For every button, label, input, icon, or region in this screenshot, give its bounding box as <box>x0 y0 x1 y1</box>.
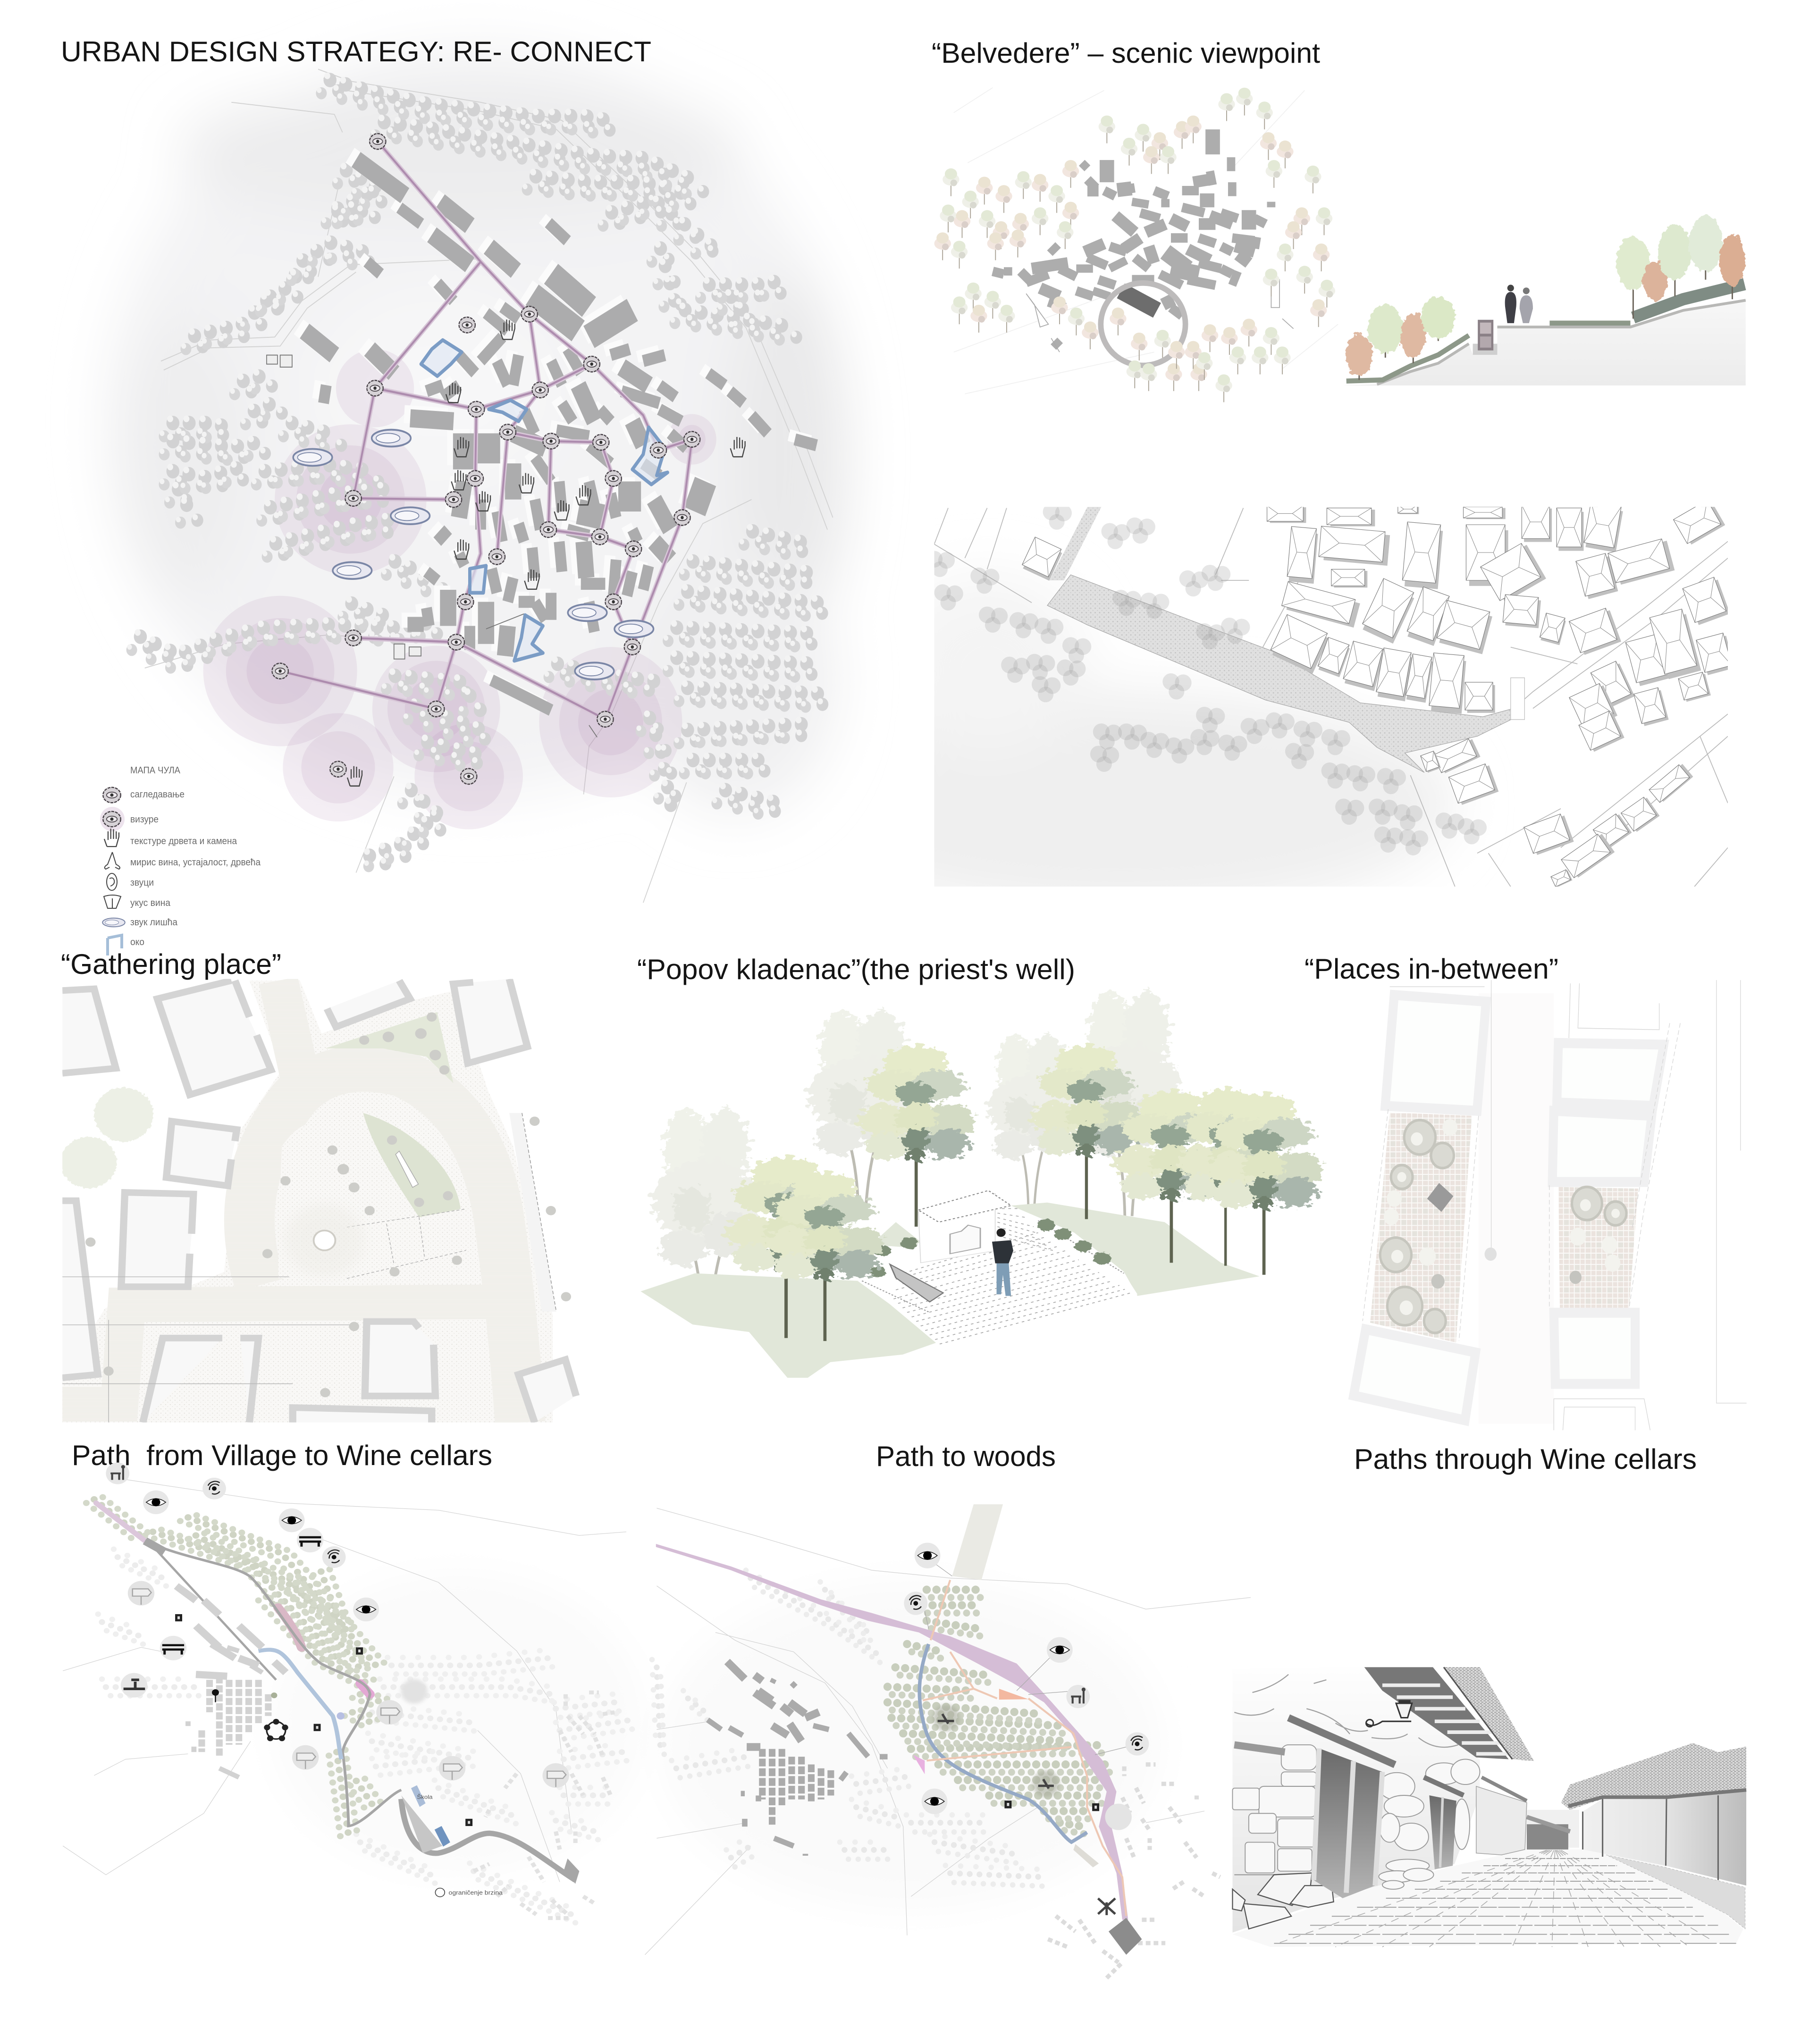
woods tree dots <box>888 1590 1111 1835</box>
south plaza and leader lines <box>925 1563 1142 1955</box>
legend row: sounds: звуци <box>130 878 154 888</box>
panel: Belvedere drawings <box>934 87 1746 887</box>
panel: senses map of the village <box>107 48 849 903</box>
map labels <box>417 1793 503 1897</box>
route icons <box>106 1463 569 1826</box>
Belvedere site plan <box>934 507 1728 887</box>
tree dots <box>85 1013 571 1397</box>
central street tone <box>1479 993 1554 1424</box>
legend: map of senses <box>100 765 261 955</box>
panel: pencil sketch of wine cellar street <box>1232 1667 1746 1947</box>
blue highlighted spaces <box>421 340 667 661</box>
legend row: textures <box>104 829 237 846</box>
bench <box>396 1151 418 1188</box>
route icons <box>904 1543 1149 1814</box>
viewshed circles <box>203 349 716 829</box>
person figure <box>992 1229 1013 1296</box>
map labels: Škola <box>417 1793 433 1801</box>
light green trees <box>60 1088 153 1189</box>
paving and stipple areas <box>62 980 553 1423</box>
site section with figures <box>1342 216 1746 385</box>
misty terrain background <box>107 48 849 813</box>
tree clusters <box>129 76 837 870</box>
legend row: eye <box>108 935 144 955</box>
right wall with posts <box>1568 1790 1746 1885</box>
title: URBAN DESIGN STRATEGY: RE- CONNECT <box>61 36 651 67</box>
heading: Popov kladenac: “Popov kladenac”(the priest's well) <box>637 954 1075 985</box>
right terrace strip and thin lines <box>62 1113 556 1423</box>
fountain <box>285 1204 364 1277</box>
pale background trees <box>652 990 1180 1324</box>
sensory route network <box>280 142 692 719</box>
left paved court <box>1370 1113 1472 1342</box>
light tree background <box>98 1549 639 1923</box>
light trees around village <box>652 1570 1048 1886</box>
wall lantern <box>1366 1701 1412 1727</box>
bottom left boulders <box>1232 1873 1334 1929</box>
axonometric village view <box>934 88 1338 402</box>
purple ridge path <box>656 1544 1128 1920</box>
panel: Popov kladenac axonometric <box>640 990 1322 1378</box>
water tap icon <box>121 1673 147 1698</box>
sense node markers <box>272 134 700 784</box>
bench <box>890 1264 943 1302</box>
cobbled pavement <box>1232 1850 1743 1947</box>
mist and faint lines <box>645 1508 1251 1955</box>
pink path segments <box>96 1503 370 1694</box>
woodland rest icons <box>933 1705 1059 1797</box>
outer village footprints <box>474 1692 614 1918</box>
walled buildings <box>1354 995 1664 1420</box>
well monument <box>918 1190 1011 1263</box>
green ground planes <box>640 1203 1260 1378</box>
blue path <box>919 1644 1087 1842</box>
terrain and road lines <box>145 69 833 903</box>
buildings <box>267 155 816 737</box>
roadside grass <box>1606 1855 1745 1929</box>
distant houses <box>1476 1777 1579 1855</box>
stairs and plaza <box>862 1206 1137 1347</box>
heading: Belvedere: “Belvedere” – scenic viewpoint <box>932 37 1320 69</box>
heading: Places in-between: “Places in-between” <box>1304 953 1558 985</box>
right paved court <box>1558 1187 1638 1308</box>
legend row: taste of wine: укус вина <box>130 898 171 908</box>
forest access strip <box>952 1504 1003 1580</box>
building footprints <box>62 979 576 1423</box>
legend row: viewing: сагледавање <box>130 789 185 800</box>
legend row: textures: текстуре дрвета и камена <box>130 836 237 846</box>
panel: Places in-between plan <box>1354 980 1747 1430</box>
panel: map of path to woods <box>645 1504 1251 1978</box>
green tree band <box>86 1497 388 1839</box>
grey route <box>145 1541 579 1884</box>
map labels: ograničenje brzina <box>449 1889 503 1896</box>
panel: Gathering place plan <box>60 979 576 1423</box>
outer settlement footprints <box>1048 1765 1220 1978</box>
legend row: vista: визуре <box>130 814 159 825</box>
touch icons <box>347 319 745 786</box>
second cellar door <box>1424 1777 1464 1869</box>
stair-like roof beams and tiled eave <box>1364 1667 1534 1761</box>
green lawns <box>325 1012 461 1217</box>
village footprints <box>707 1661 888 1856</box>
blue route and blue plots <box>259 1650 450 1847</box>
shrubs <box>870 1219 1111 1277</box>
legend row: smells: мирис вина, устајалост, дрвећа <box>130 857 261 868</box>
legend title: МАПА ЧУЛА <box>130 765 181 776</box>
right tiled roof <box>1561 1743 1746 1810</box>
crossed tower icon <box>1098 1898 1115 1915</box>
legend row: smells <box>105 852 261 869</box>
leaf sound icons <box>293 430 654 679</box>
orange forest paths <box>913 1580 1126 1916</box>
heading: Gathering place: “Gathering place” <box>61 948 281 980</box>
outlines and lamp post <box>1363 980 1747 1430</box>
wooden cellar door <box>1234 1718 1395 1898</box>
panel: map of path from village to wine cellars <box>63 1463 646 1923</box>
heading: Path from Village to Wine cellars: Path from Village to Wine cellars <box>72 1440 492 1471</box>
faint mist and road lines <box>63 1480 646 1882</box>
legend row: leaf sound <box>102 917 178 928</box>
legend row: viewing <box>103 787 185 803</box>
green foreground trees <box>724 1045 1322 1341</box>
legend row: eye: око <box>130 937 144 947</box>
left stone wall <box>1232 1667 1480 1933</box>
legend row: leaf sound: звук лишћа <box>130 917 178 928</box>
heading: Paths through Wine cellars: Paths through Wine cellars <box>1354 1443 1697 1475</box>
heading: Path to woods: Path to woods <box>876 1441 1056 1472</box>
village footprints <box>177 1586 286 1777</box>
legend row: taste of wine <box>104 895 171 908</box>
legend row: vista <box>100 807 159 831</box>
gathering circle and marker <box>212 1679 428 1741</box>
legend row: sounds <box>107 873 154 890</box>
